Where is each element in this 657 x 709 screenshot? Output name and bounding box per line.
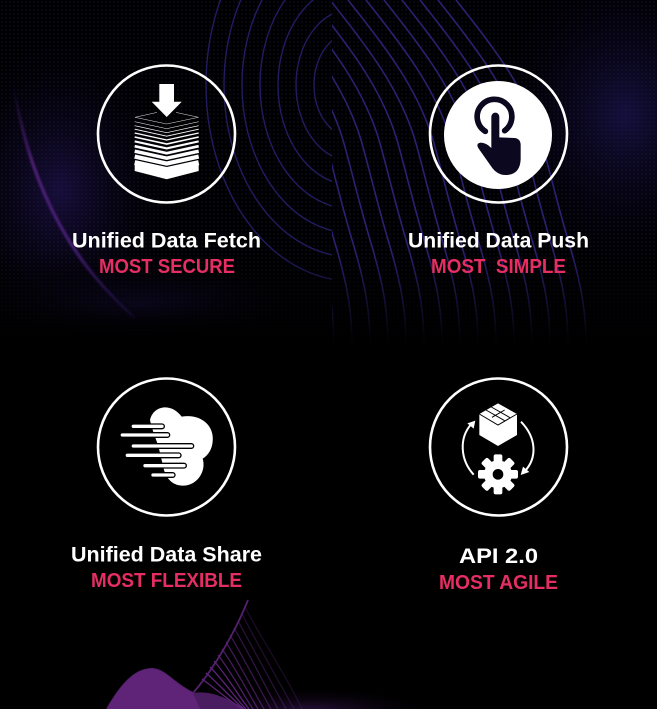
panel: API 2.0 xyxy=(430,378,567,594)
label: MOST SIMPLE: MOST SIMPLE xyxy=(431,256,566,278)
label: MOST AGILE: MOST AGILE xyxy=(439,572,558,594)
panel: Unified Data Share xyxy=(71,378,262,592)
icon: pointing hand on disc xyxy=(444,81,552,189)
heading: Unified Data Push: Unified Data Push xyxy=(408,230,589,252)
label: MOST FLEXIBLE: MOST FLEXIBLE xyxy=(91,570,242,592)
icon: arrow into data stack xyxy=(135,84,199,179)
panel: Unified Data Fetch xyxy=(72,66,261,278)
icon: box and gear cycle xyxy=(463,403,534,494)
heading: API 2.0: API 2.0 xyxy=(459,545,538,568)
circle ring: api xyxy=(430,378,567,516)
heading: Unified Data Share: Unified Data Share xyxy=(71,544,262,566)
icon: cloud with speed lines xyxy=(120,407,213,486)
circle ring: share xyxy=(98,378,235,516)
panel: Unified Data Push xyxy=(408,66,589,278)
label: MOST SECURE: MOST SECURE xyxy=(99,256,235,278)
circle ring: push xyxy=(430,66,567,202)
bottom purple wave xyxy=(106,600,392,709)
circle ring: fetch xyxy=(98,66,235,202)
left purple ribbon xyxy=(13,85,135,318)
heading: Unified Data Fetch: Unified Data Fetch xyxy=(72,230,261,252)
